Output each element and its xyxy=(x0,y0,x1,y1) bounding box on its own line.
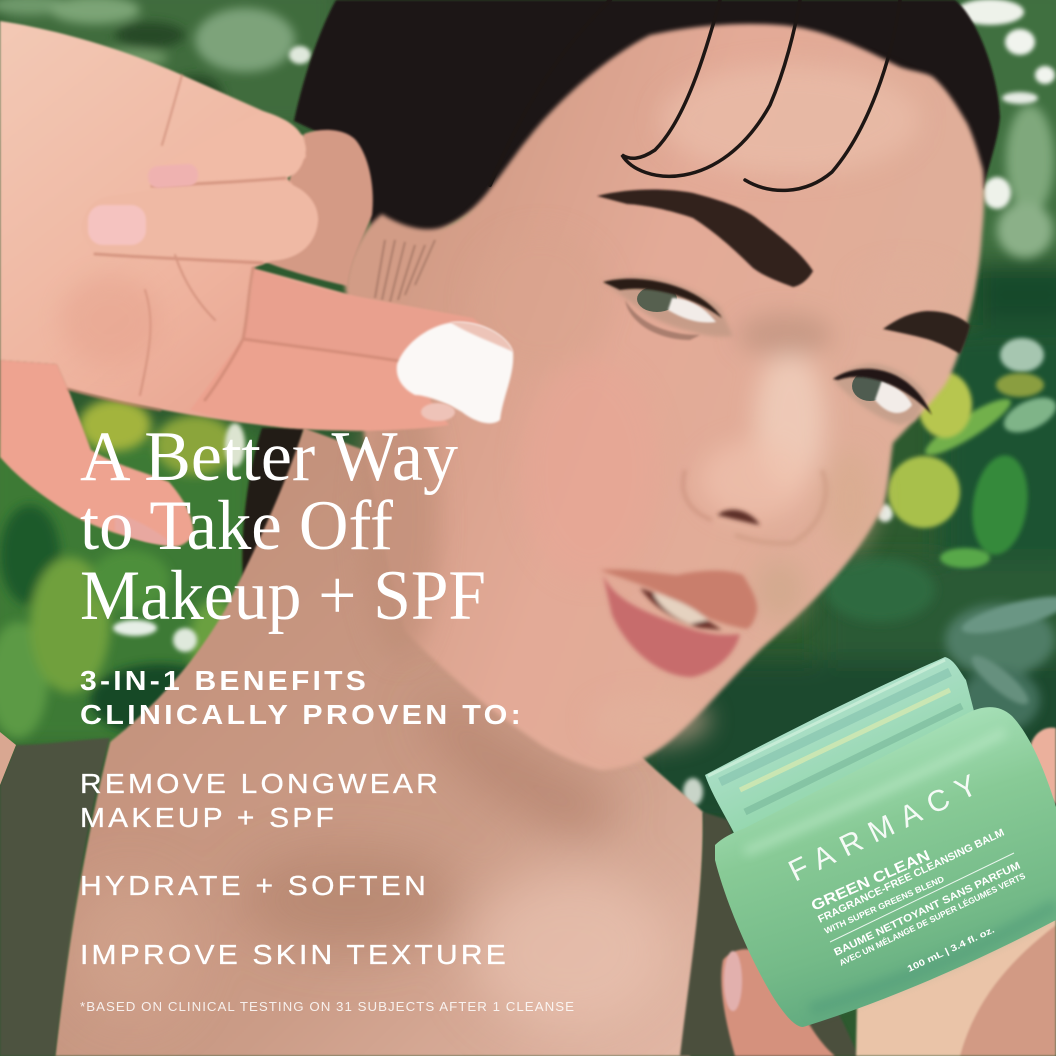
hair behind neck xyxy=(242,428,304,580)
finger: index xyxy=(81,180,318,261)
wisps near ear xyxy=(375,240,435,302)
jar logo: FARMACY xyxy=(784,769,982,888)
finger: pinky xyxy=(0,360,193,547)
eye: left xyxy=(603,276,733,340)
jar divider xyxy=(830,853,1014,942)
jar rim highlights xyxy=(708,660,962,812)
title: to Take Off xyxy=(80,487,393,565)
fingertip xyxy=(1030,728,1056,805)
jar body xyxy=(715,707,1056,1027)
jar body sheen xyxy=(745,732,1005,852)
palm under jar xyxy=(856,915,1056,1056)
jar french name: BAUME NETTOYANT SANS PARFUM xyxy=(832,860,1023,959)
jar neck xyxy=(705,657,975,835)
palm creases xyxy=(68,75,399,410)
tank top: right strap xyxy=(680,812,858,1056)
subheading: 3-IN-1 BENEFITS xyxy=(80,665,369,696)
fingernails xyxy=(88,163,199,545)
jar volume: 100 mL | 3.4 fl. oz. xyxy=(906,925,996,974)
eyebrows xyxy=(597,190,970,354)
ear xyxy=(263,130,373,286)
neck and chest xyxy=(55,428,703,1056)
jar product name: GREEN CLEAN xyxy=(809,847,933,915)
jar blend line: WITH SUPER GREENS BLEND xyxy=(823,874,946,936)
cleansing balm swatch xyxy=(397,322,513,423)
hand holding jar xyxy=(721,728,1056,1056)
eye: right xyxy=(833,364,932,425)
finger: ring xyxy=(190,339,449,431)
footnote: *BASED ON CLINICAL TESTING ON 31 SUBJECTS AFTER 1 CLEANSE xyxy=(80,999,575,1014)
neck shadow under jaw xyxy=(70,700,670,1030)
shoulder: left sliver xyxy=(0,732,16,785)
hand with fingers xyxy=(0,21,500,547)
benefit: remove makeup xyxy=(80,768,441,833)
finger: upper xyxy=(149,111,306,187)
title: Makeup + SPF xyxy=(80,557,486,635)
hair xyxy=(294,0,1000,240)
subheading: CLINICALLY PROVEN TO: xyxy=(80,699,524,730)
jar descriptor: FRAGRANCE-FREE CLEANSING BALM xyxy=(816,827,1007,926)
finger: applying balm xyxy=(243,268,495,361)
face xyxy=(345,24,984,770)
jar french blend: AVEC UN MÉLANGE DE SUPER LÉGUMES VERTS xyxy=(838,870,1027,968)
benefit: hydrate: HYDRATE + SOFTEN xyxy=(80,870,429,901)
product jar xyxy=(705,657,1056,1027)
title: A Better Way xyxy=(80,418,458,496)
nose xyxy=(683,470,826,543)
lips xyxy=(600,569,757,677)
benefit: texture: IMPROVE SKIN TEXTURE xyxy=(80,939,509,970)
title xyxy=(80,418,486,635)
thumb xyxy=(721,949,835,1056)
benefit: remove makeup: REMOVE LONGWEAR xyxy=(80,768,441,799)
thumbnail xyxy=(724,951,742,1011)
palm shading xyxy=(60,275,160,365)
subheading xyxy=(80,665,524,730)
icon: green apples xyxy=(888,372,1044,528)
benefit: remove makeup: MAKEUP + SPF xyxy=(80,802,337,833)
tank top: left xyxy=(0,738,110,1056)
strand of wet hair xyxy=(490,0,900,190)
face shading xyxy=(360,65,955,745)
palm and wrist xyxy=(0,21,500,431)
